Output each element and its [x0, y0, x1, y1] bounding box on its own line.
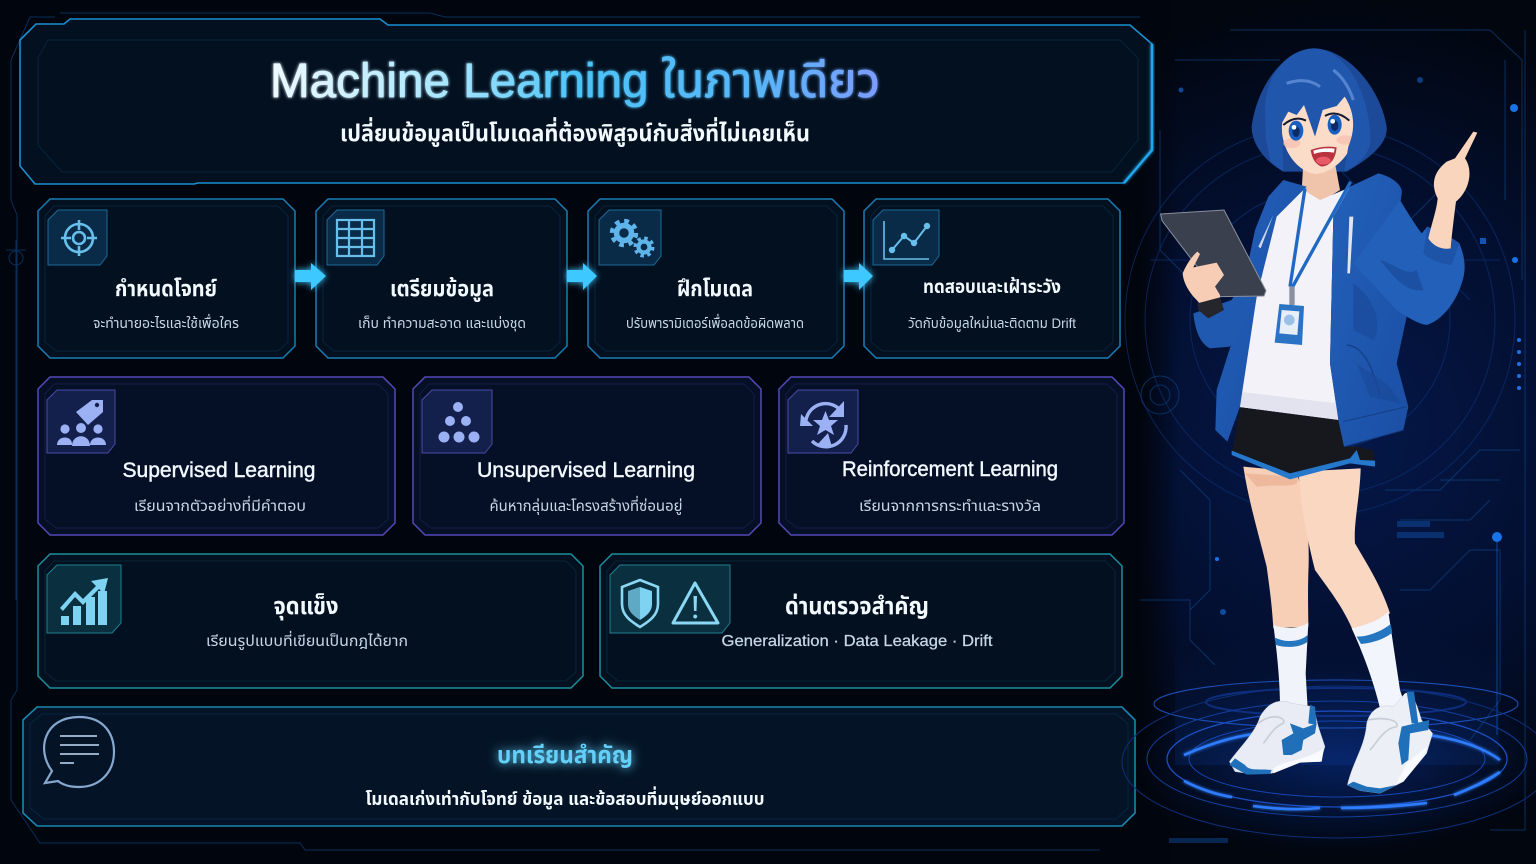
tablet — [1161, 210, 1266, 297]
legs and shoes — [1229, 467, 1433, 793]
holding hand — [1183, 252, 1224, 310]
panel: step 4 test and monitor — [864, 199, 1120, 358]
subtitle: เปลี่ยนข้อมูลเป็นโมเดลที่ต้องพิสูจน์กับสิ่งที่ไม่เคยเห็น — [340, 117, 810, 147]
panel: unsupervised learning — [413, 377, 761, 535]
card description: เรียนจากการกระทำและรางวัล — [859, 498, 1041, 515]
card heading: ด่านตรวจสำคัญ — [785, 592, 929, 620]
card heading: Reinforcement Learning — [842, 458, 1058, 481]
hair back — [1252, 48, 1387, 172]
lanyard and badge — [1290, 182, 1351, 287]
hologram platform — [1122, 640, 1536, 850]
icon: target — [48, 210, 107, 265]
upper body — [1161, 48, 1477, 479]
card heading: Supervised Learning — [122, 459, 316, 482]
step heading: ทดสอบและเฝ้าระวัง — [923, 276, 1061, 298]
card description: เรียนจากตัวอย่างที่มีคำตอบ — [134, 495, 306, 515]
step heading: เตรียมข้อมูล — [390, 276, 494, 302]
card description: ค้นหากลุ่มและโครงสร้างที่ซ่อนอยู่ — [490, 495, 682, 515]
jacket right side and hood — [1330, 173, 1417, 447]
panel: reinforcement learning — [779, 377, 1124, 535]
card heading: Unsupervised Learning — [477, 459, 695, 482]
panel: key lesson — [23, 707, 1135, 826]
raised arm and hand — [1428, 132, 1477, 249]
left shoe — [1229, 701, 1325, 773]
icon: shield and warning — [610, 565, 730, 633]
jacket left side — [1215, 180, 1307, 442]
icon: gears — [599, 210, 661, 265]
arrow: step 2 to 3 — [567, 263, 597, 290]
lesson text: โมเดลเก่งเท่ากับโจทย์ ข้อมูล และข้อสอบที่มนุษย์ออกแบบ — [366, 786, 764, 810]
panel: step 2 prepare data — [316, 199, 567, 358]
panel: strengths — [38, 554, 583, 688]
step description: เก็บ ทำความสะอาด และแบ่งชุด — [358, 315, 526, 332]
character: girl with tablet — [1161, 48, 1477, 793]
card heading: จุดแข็ง — [274, 593, 338, 621]
right sleeve — [1353, 200, 1465, 325]
icon: reward cycle — [788, 390, 858, 453]
step heading: กำหนดโจทย์ — [115, 276, 217, 301]
icon: data table — [327, 210, 384, 265]
face — [1282, 87, 1358, 174]
panel: supervised learning — [38, 377, 395, 535]
step description: ปรับพารามิเตอร์เพื่อลดข้อผิดพลาด — [626, 313, 804, 331]
step description: วัดกับข้อมูลใหม่และติดตาม Drift — [908, 315, 1076, 332]
shirt — [1237, 187, 1352, 420]
left sleeve — [1193, 247, 1257, 348]
panel: step 1 define problem — [38, 199, 295, 358]
icon: tagged people — [47, 390, 115, 453]
panel: title header — [20, 19, 1152, 184]
lesson heading: บทเรียนสำคัญ — [497, 742, 633, 769]
shorts — [1232, 407, 1375, 478]
step heading: ฝึกโมเดล — [677, 276, 753, 301]
panel: step 3 train model — [588, 199, 844, 358]
icon: speech bubble — [44, 717, 114, 787]
right shoe — [1347, 693, 1433, 793]
arrow: step 3 to 4 — [844, 263, 873, 290]
icon: line chart — [873, 210, 939, 265]
hair front — [1265, 48, 1371, 172]
arrow: step 1 to 2 — [295, 263, 326, 290]
step description: จะทำนายอะไรและใช้เพื่อใคร — [93, 313, 239, 331]
card description: เรียนรูปแบบที่เขียนเป็นกฎได้ยาก — [206, 630, 408, 650]
icon: rising bars — [47, 565, 121, 633]
icon: clusters — [422, 390, 492, 453]
card description: Generalization · Data Leakage · Drift — [722, 633, 993, 650]
title: Machine Learning ในภาพเดียว — [270, 55, 880, 108]
panel: key checkpoints — [600, 554, 1122, 688]
